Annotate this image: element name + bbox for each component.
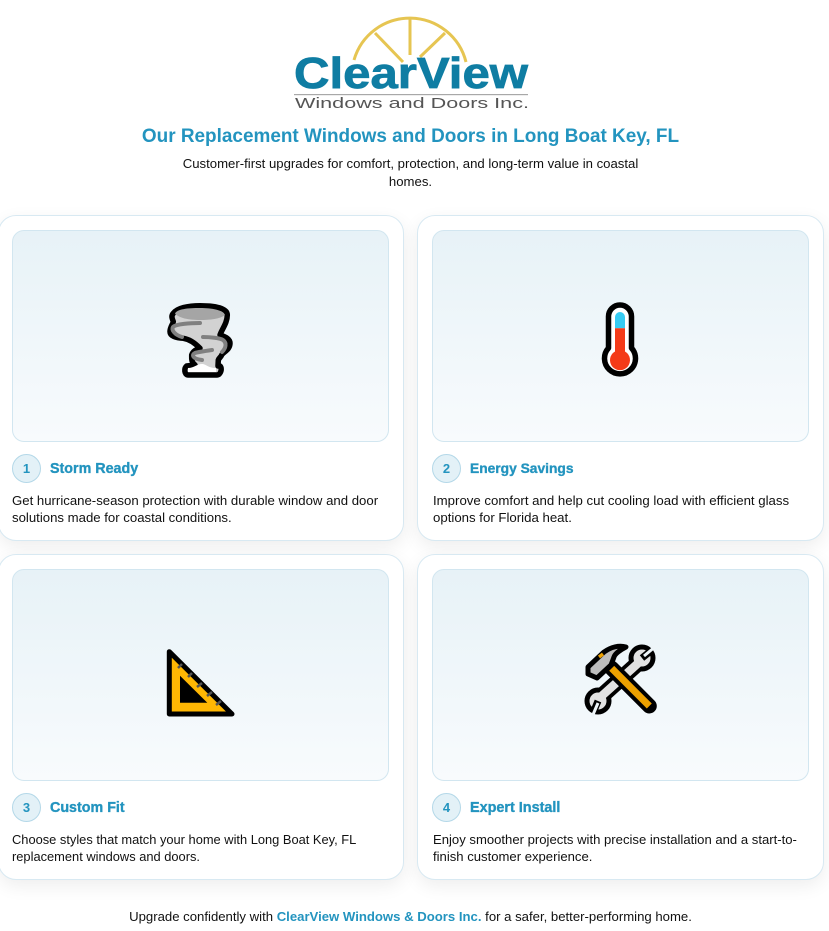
step 1 heading: Storm Ready bbox=[50, 461, 138, 477]
footer text: Upgrade confidently with ClearView Windows & Doors Inc. for a safer, better-performing home. bbox=[129, 909, 692, 924]
illustration: hammer and wrench bbox=[432, 569, 809, 781]
step 4 heading: Expert Install bbox=[470, 800, 560, 816]
logo tagline: Windows and Doors Inc. bbox=[295, 95, 529, 112]
illustration: triangle ruler bbox=[12, 569, 389, 781]
subtitle: Customer-first upgrades for comfort, protection, and long-term value in coastal bbox=[183, 156, 638, 171]
step 1 badge: 1 bbox=[23, 461, 30, 476]
logo arch bbox=[354, 17, 466, 62]
title: Our Replacement Windows and Doors in Long Boat Key, FL bbox=[142, 126, 679, 147]
step 1 badge bbox=[12, 454, 41, 483]
step 3 badge: 3 bbox=[23, 800, 30, 815]
step 3 heading: Custom Fit bbox=[50, 800, 125, 816]
subtitle: homes. bbox=[389, 174, 432, 189]
step 4 badge: 4 bbox=[443, 800, 450, 815]
step 2 badge: 2 bbox=[443, 461, 450, 476]
step 1 description: solutions made for coastal conditions. bbox=[12, 510, 232, 525]
panel: storm ready bbox=[0, 215, 404, 541]
step 4 badge bbox=[432, 793, 461, 822]
step 3 description: Choose styles that match your home with Long Boat Key, FL bbox=[12, 832, 356, 847]
logo bbox=[294, 16, 529, 112]
step 2 badge bbox=[432, 454, 461, 483]
step 3 badge bbox=[12, 793, 41, 822]
illustration: tornado bbox=[12, 230, 389, 442]
step 1 description: Get hurricane-season protection with durable window and door bbox=[12, 493, 378, 508]
panel: expert install bbox=[417, 554, 824, 880]
logo wordmark: ClearView bbox=[294, 49, 529, 98]
panel: energy savings bbox=[417, 215, 824, 541]
step 3 description: replacement windows and doors. bbox=[12, 849, 200, 864]
step 4 description: Enjoy smoother projects with precise installation and a start-to- bbox=[433, 832, 797, 847]
step 2 description: Improve comfort and help cut cooling load with efficient glass bbox=[433, 493, 789, 508]
step 3 description bbox=[12, 832, 356, 864]
step 4 description: finish customer experience. bbox=[433, 849, 592, 864]
subtitle bbox=[183, 156, 638, 189]
step 2 description: options for Florida heat. bbox=[433, 510, 572, 525]
step 4 description bbox=[433, 832, 797, 864]
step 1 description bbox=[12, 493, 378, 525]
step 2 description bbox=[433, 493, 789, 525]
illustration: thermometer bbox=[432, 230, 809, 442]
step 2 heading: Energy Savings bbox=[470, 461, 574, 476]
panel: custom fit bbox=[0, 554, 404, 880]
